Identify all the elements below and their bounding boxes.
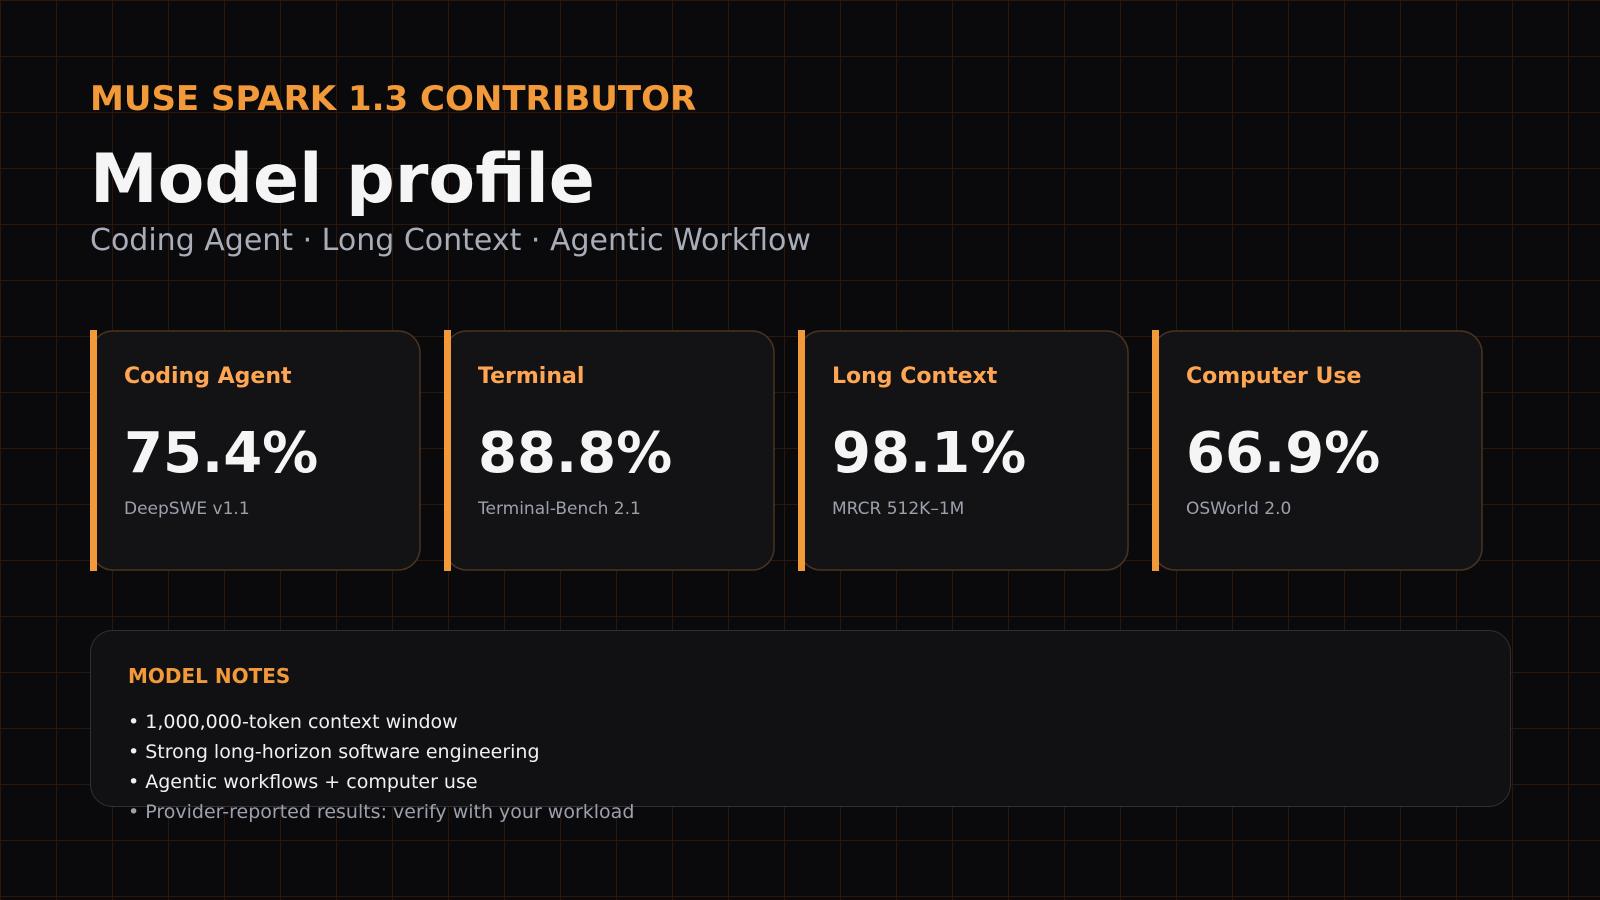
panel: Terminal: Terminal [478,364,584,389]
panel: Computer Use: OSWorld 2.0 [1186,499,1291,519]
panel: Long Context: Long Context [832,364,998,389]
panel: Long Context [798,330,1128,571]
notes list: • Provider-reported results: verify with your workload [128,801,634,823]
notes list: • Strong long-horizon software engineering [128,741,540,763]
notes list [128,711,634,823]
panel: Terminal [444,330,774,571]
subtitle: Coding Agent · Long Context · Agentic Workflow [90,223,811,258]
notes heading: MODEL NOTES [128,664,290,688]
notes list: • 1,000,000-token context window [128,711,458,733]
eyebrow heading: MUSE SPARK 1.3 CONTRIBUTOR [90,79,696,119]
panel: Long Context: MRCR 512K–1M [832,499,964,519]
panel: Computer Use: Computer Use [1186,364,1361,389]
panel: Terminal: 88.8% [478,421,672,486]
panel: Coding Agent: 75.4% [124,421,318,486]
panel: Long Context: 98.1% [832,421,1026,486]
panel: Computer Use [1152,330,1482,571]
notes list: • Agentic workflows + computer use [128,771,478,793]
panel: Coding Agent: DeepSWE v1.1 [124,499,250,519]
panel: Coding Agent [90,330,420,571]
panel: Coding Agent: Coding Agent [124,364,292,389]
title: Model profile [90,140,595,219]
panel: Terminal: Terminal-Bench 2.1 [477,499,641,519]
panel: model notes [90,630,1510,823]
panel: Computer Use: 66.9% [1186,421,1380,486]
